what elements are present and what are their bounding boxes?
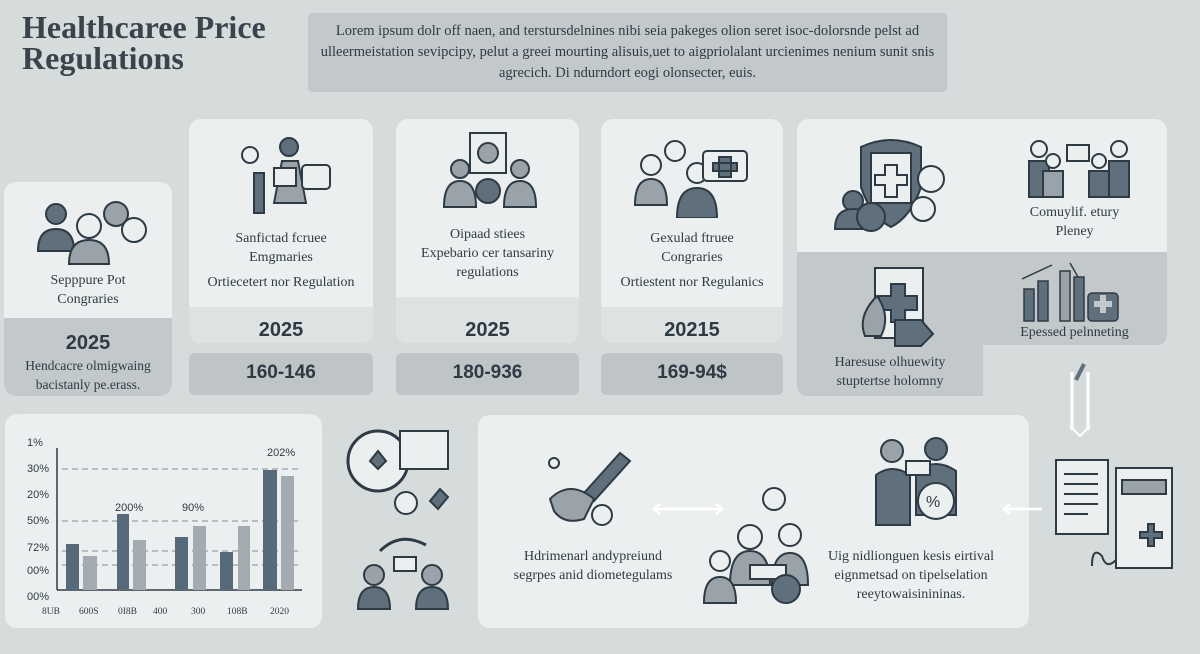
panel: card 1 xyxy=(4,182,172,396)
value box 2: 160-146 xyxy=(246,362,316,383)
panel: bar chart: 00% xyxy=(27,565,49,577)
panel: bottom process: eignmetsad on tipelselation xyxy=(834,568,988,583)
panel: right policy block: Pleney xyxy=(1055,224,1094,239)
icon: businessman percent: % xyxy=(926,494,940,511)
panel: card 2: 2025 xyxy=(259,319,303,341)
icon: document cross xyxy=(862,267,934,347)
icon: people with cross xyxy=(634,140,748,218)
panel: card 3: Oipaad stiees xyxy=(450,227,525,242)
panel: card 4: 20215 xyxy=(664,319,720,341)
panel: bottom process: Hdrimenarl andypreiund xyxy=(524,549,662,564)
icon: shield xyxy=(834,139,945,232)
panel: card 3: regulations xyxy=(456,265,519,280)
icon: people xyxy=(37,201,147,265)
arrow: double xyxy=(652,503,724,515)
panel: bar chart: 200% xyxy=(115,502,143,514)
panel: bar chart: 400 xyxy=(153,607,168,617)
icon: documents xyxy=(1055,459,1173,569)
title xyxy=(22,9,266,76)
panel: bar chart: 1% xyxy=(27,437,43,449)
icon: community xyxy=(1028,140,1130,198)
panel: card 1: Hendcacre olmigwaing xyxy=(25,358,151,373)
panel: bar chart: 600S xyxy=(79,607,99,617)
panel: bottom process: Uig nidlionguen kesis eirtival xyxy=(828,549,994,564)
panel: card 4: Congraries xyxy=(661,250,723,265)
arrow: down xyxy=(1070,363,1090,438)
panel: card 2: Sanfictad fcruee xyxy=(235,231,327,246)
panel: bar chart: 0I8B xyxy=(118,607,137,617)
panel: card 4 xyxy=(601,119,783,343)
value box 3: 180-936 xyxy=(453,362,522,383)
panel: card 4: Ortiestent nor Regulanics xyxy=(620,275,764,290)
icon: hand with pen xyxy=(548,452,632,526)
value box 4 xyxy=(601,353,783,395)
panel: bar chart: 2020 xyxy=(270,607,289,617)
panel: bar chart: 108B xyxy=(227,607,248,617)
panel: card 3 xyxy=(396,119,579,343)
panel: card 4: Gexulad ftruee xyxy=(650,231,734,246)
icon group: clock and people xyxy=(346,430,450,610)
panel: bar chart: 90% xyxy=(182,502,204,514)
panel: right policy block: stuptertse holomny xyxy=(837,374,943,389)
arrow: left xyxy=(1002,503,1042,515)
title: Regulations xyxy=(22,40,184,76)
panel: card 3: Expebario cer tansariny xyxy=(421,246,554,261)
value box 2 xyxy=(189,353,373,395)
panel: bar chart: 30% xyxy=(27,463,49,475)
panel: card 1: bacistanly pe.erass. xyxy=(36,377,140,392)
icon: bar chart growth xyxy=(1022,262,1119,322)
panel: card 2: Ortiecetert nor Regulation xyxy=(208,275,354,290)
icon: group xyxy=(443,132,537,208)
panel: bottom process xyxy=(478,415,1029,628)
panel: bar chart: 300 xyxy=(191,607,206,617)
panel: bar chart: 50% xyxy=(27,515,49,527)
panel: right policy block: Epessed pelnneting xyxy=(1020,325,1129,340)
panel: right policy block: Haresuse olhuewity xyxy=(835,355,945,370)
panel: card 2 xyxy=(189,119,373,343)
panel: card 3: 2025 xyxy=(465,319,510,341)
panel: bar chart: 8UB xyxy=(42,607,60,617)
panel: right policy block xyxy=(797,119,1167,396)
value box 3 xyxy=(396,353,579,395)
panel: card 2: Emgmaries xyxy=(249,250,313,265)
panel: card 1: 2025 xyxy=(66,332,110,354)
panel: bar chart xyxy=(5,414,322,628)
panel: card 1: Sepppure Pot xyxy=(50,273,126,288)
panel: right policy block: Comuylif. etury xyxy=(1030,205,1119,220)
intro text box: Lorem ipsum dolr off naen, and terstursdelnines nibi seia pakeges olion seret isoc-dolorsnde pelst ad ulleermeistation sevipcipy, pelut a greei mourting alisuis,uet to aigpriolalant urcienimes nenium sunit snis agrecich. Di ndurndort eogi olonsecter, euis. xyxy=(321,23,934,81)
panel: bottom process: segrpes anid diometegulams xyxy=(514,568,672,583)
panel: bottom process: reeytowaisinininas. xyxy=(857,587,965,602)
icon: family xyxy=(703,487,809,604)
panel: bar chart: 72% xyxy=(27,542,49,554)
icon: businessman percent xyxy=(875,437,957,526)
panel: bar chart: 202% xyxy=(267,447,295,459)
panel: card 1: Congraries xyxy=(57,292,119,307)
panel: bar chart: 20% xyxy=(27,489,49,501)
title: Healthcaree Price xyxy=(22,9,266,45)
panel: bar chart: 00% xyxy=(27,591,49,603)
icon: person with money xyxy=(241,137,331,214)
value box 4: 169-94$ xyxy=(657,362,727,383)
